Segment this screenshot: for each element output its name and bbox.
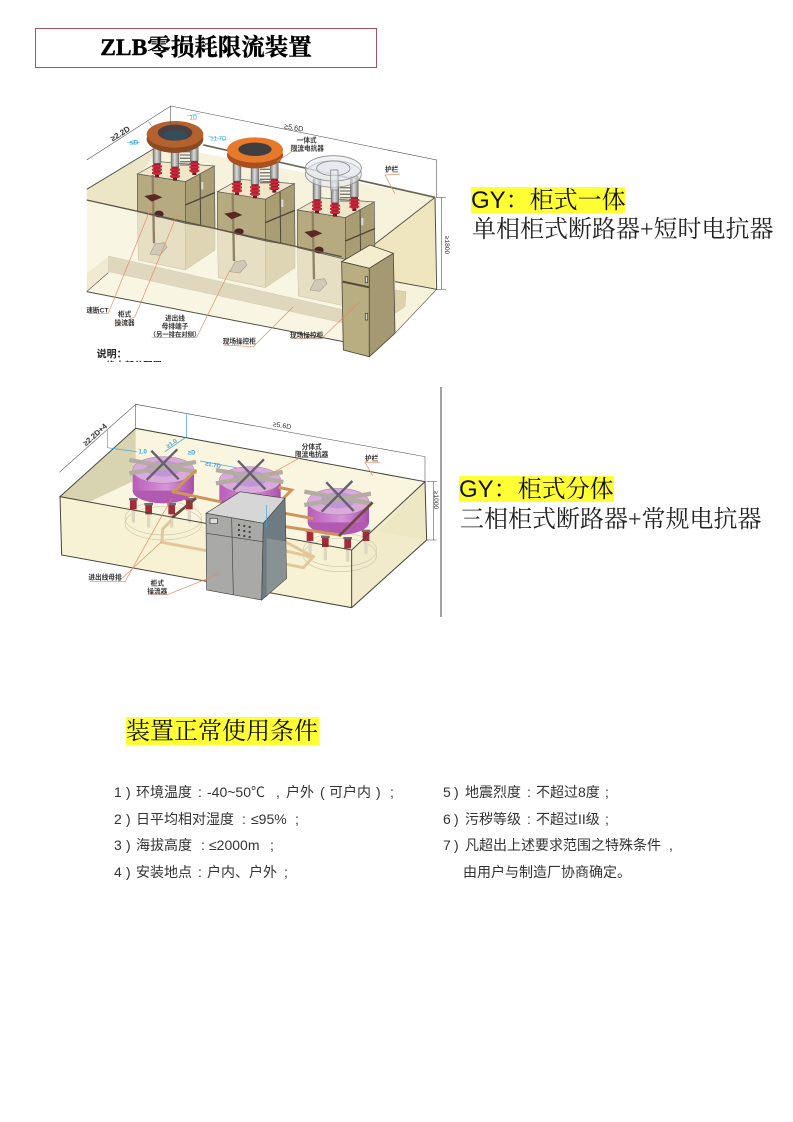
condition 1: ) [376,784,381,800]
diagram 1 labels: 绝大部分配置 [106,360,162,371]
condition 6: 不超过II级 [536,811,600,827]
condition 1: 户外 [286,784,314,800]
diagram 1 labels: 一体式 [297,136,317,145]
diagram 1 labels: ≥2.2D [109,124,132,143]
reactor 1 legs [129,498,194,528]
reactor bases [125,502,377,572]
condition 3: : [201,837,205,853]
diagram 1 labels: 护栏 [385,165,399,174]
enclosure edges [60,428,427,608]
heading: cabinet integrated: GY：柜式一体 [471,187,626,214]
condition 3 [114,837,274,853]
front rail line [87,200,342,257]
diagram 2 labels: 护栏 [365,453,379,462]
condition 6 [443,811,609,827]
title box [35,28,377,68]
condition 5: ) [454,784,459,800]
cabinet 2 [217,158,295,288]
reactor 3 transparent ring [305,156,361,190]
condition 5 [443,784,609,800]
heading: cabinet separated: GY：柜式分体 [459,476,614,503]
reactor 2 [216,459,283,513]
cabinet 1 [137,140,215,270]
condition 3: ≤2000m [209,837,260,853]
diagram 1 labels: 说明： [97,347,127,360]
enclosure [60,428,427,608]
front wall overlay on cabinet [267,538,287,596]
condition 6: ) [454,811,459,827]
heading: normal conditions: 装置正常使用条件 [126,718,318,745]
condition 2: ) [126,811,131,827]
switchgear cabinet [206,492,287,600]
local control cabinet [342,245,395,357]
condition 4: 4 [114,864,122,880]
condition 3: 3 [114,837,122,853]
diagram 2 labels: 1.0 [139,449,147,455]
reactor 1 [129,449,197,503]
diagram 1 labels: 1D [190,115,198,121]
conditions list left [114,784,394,880]
condition 5: 地震烈度 [465,784,521,800]
condition 4: 安装地点 [136,864,192,880]
diagram 1 labels: 现场操控柜 [290,330,324,339]
diagrams [59,106,450,617]
diagram 2 labels: 操流器 [147,587,168,596]
condition 2 [114,811,299,827]
diagram 2 labels: 进出线母排 [88,573,122,582]
diagram 2 labels [81,421,439,596]
condition 6: 污秽等级 [465,811,521,827]
diagram 2 labels: ≥1000 [432,491,439,510]
leader lines [88,152,400,347]
dimension lines [59,404,437,540]
diagram 1 labels: ≥5.6D [283,121,304,134]
diagram 2 labels: 柜式 [151,579,164,588]
condition 1: , [276,784,280,800]
diagram 1 labels: 母排端子 [162,322,189,331]
condition 1: -40~50℃ [207,784,265,800]
condition 1: ; [390,784,394,800]
equipment base platform [86,256,406,323]
diagram 1 labels [86,115,450,371]
leader lines [90,458,380,594]
condition 6: : [527,811,531,827]
condition 1 [114,784,394,800]
condition 7: , [669,837,673,853]
diagram 1 labels: 操流器 [115,318,135,327]
condition 1: 环境温度 [136,784,192,800]
description: integrated: 单相柜式断路器+短时电抗器 [472,217,774,243]
condition 1: 1 [114,784,122,800]
vertical divider [440,387,442,617]
title text: ZLB零损耗限流装置 [100,35,312,61]
diagram 1 labels: ≤D [130,139,138,146]
condition 7: 7 [443,837,451,853]
condition 1: : [198,784,202,800]
diagram 1 labels: 柜式 [118,310,132,319]
condition 5: : [527,784,531,800]
condition 2: ≤95% [251,811,287,827]
reactor 3 legs [306,530,370,562]
condition 7: 凡超出上述要求范围之特殊条件 [465,837,661,853]
blue clearance lines [107,413,267,528]
diagram 2 labels: 分体式 [302,442,322,451]
condition 6: ; [605,811,609,827]
condition 7: ) [454,837,459,853]
enclosure edges [87,145,437,342]
diagram 1 labels: 速断CT [86,306,108,315]
condition 4: ) [126,864,131,880]
diagram 1 labels: 进出线 [165,314,185,323]
diagram 2 labels: ≥1.0 [166,438,179,450]
reactor 3 [304,481,372,535]
condition 2: ; [295,811,299,827]
condition 5: 不超过8度 [536,784,600,800]
condition 2: : [242,811,246,827]
reactor 2 copper ring [227,137,283,168]
condition 4: 户内、户外 [207,864,277,880]
condition 6: 6 [443,811,451,827]
condition 1: ( [320,784,325,800]
conditions list right [443,784,673,880]
cabinet 3 [297,176,375,306]
condition 2: 2 [114,811,122,827]
diagram 1 labels: （另一排在对侧） [150,329,200,338]
condition 1: ) [126,784,131,800]
diagram 2 labels: ≥5.6D [272,421,292,431]
condition 5: 5 [443,784,451,800]
enclosure walls [87,145,437,357]
diagram 2: separated cabinet type [59,404,439,608]
condition 4: : [198,864,202,880]
copper busbars [162,471,372,568]
diagram 2 labels: ≥2.2D+4 [81,421,109,448]
condition 5: ; [605,784,609,800]
diagram 1 labels: ≥1.7D [210,137,227,143]
condition 7 continued: 由用户与制造厂协商确定。 [463,864,631,880]
diagram 2 labels: 限流电抗器 [295,449,329,458]
diagram 1: integrated cabinet type [86,106,450,371]
condition 2: 日平均相对湿度 [136,811,234,827]
diagram 2 labels: ≥D [188,450,196,456]
reactor 1 copper ring [147,121,203,153]
condition 4 [114,864,288,880]
dimension lines [87,106,446,289]
description: separated: 三相柜式断路器+常规电抗器 [460,507,762,533]
diagram 1 labels: 现场操控柜 [223,336,256,345]
condition 3: ; [270,837,274,853]
diagram 1 labels: 限流电抗器 [291,143,324,152]
condition 1: 可户内 [329,784,371,800]
diagram 2 labels: ≥1.7D [204,461,222,470]
condition 3: ) [126,837,131,853]
condition 3: 海拔高度 [136,837,192,853]
diagram 1 labels: ≥1800 [443,236,450,255]
condition 4: ; [284,864,288,880]
